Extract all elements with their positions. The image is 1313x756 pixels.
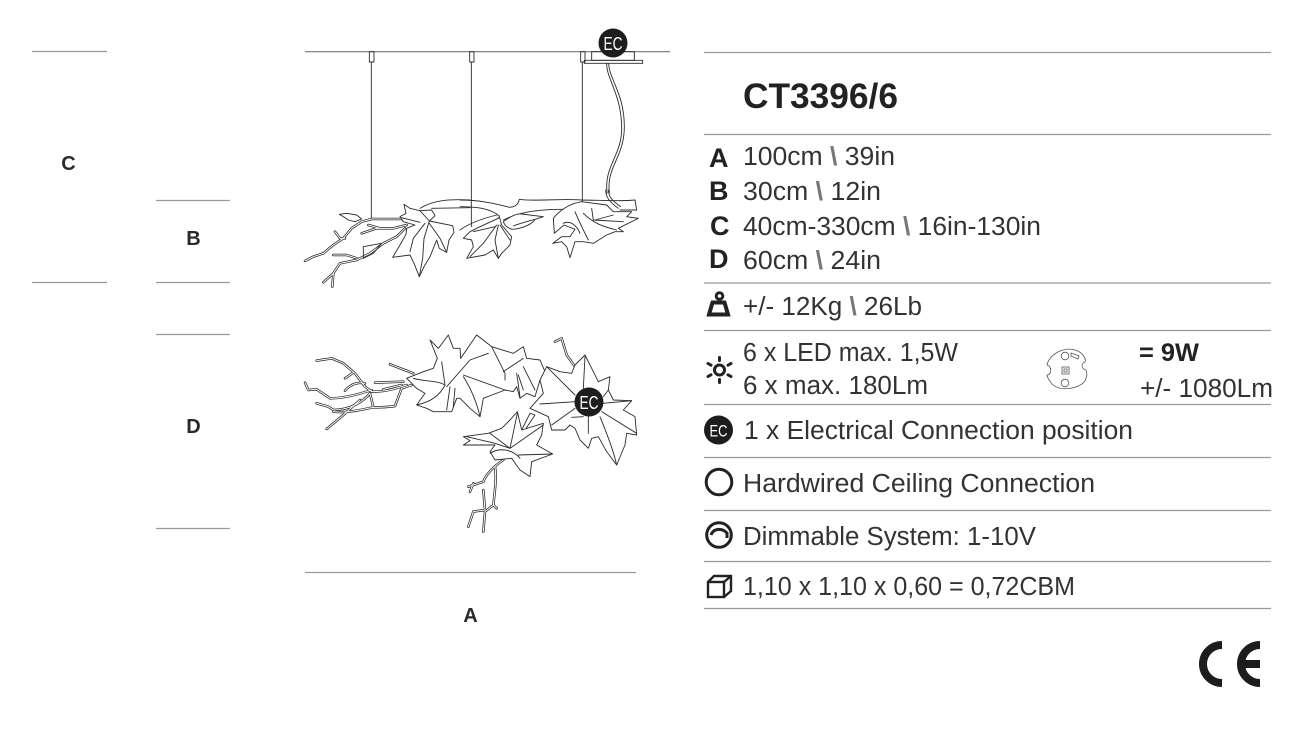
icon: EC: EC: [710, 422, 728, 440]
dimensions list: 100cm \ 39in: [743, 143, 895, 171]
product code title: CT3396/6: [743, 77, 898, 116]
icon: ceiling connection: [706, 469, 732, 495]
total power: = 9W: [1139, 339, 1199, 367]
icon: dimmable: [707, 523, 731, 547]
EC marker on side view: [598, 28, 628, 58]
electrical connection text: 1 x Electrical Connection position: [744, 417, 1133, 445]
hardwired text: Hardwired Ceiling Connection: [743, 470, 1095, 498]
EC marker on top view: [574, 388, 604, 416]
icon: LED module: [1047, 349, 1087, 389]
dimensions list: B: [709, 176, 728, 206]
dimensions list: 30cm \ 12in: [743, 178, 881, 206]
dimensions list: C: [710, 211, 730, 241]
top plan drawing: [305, 335, 637, 532]
EC marker on side view: EC: [604, 34, 622, 54]
side elevation drawing: [305, 52, 670, 287]
dimmable text: Dimmable System: 1-10V: [743, 523, 1036, 551]
icon: light: [708, 358, 731, 382]
icon: box: [708, 576, 731, 597]
LED text: [743, 339, 958, 400]
dimensions list: D: [709, 244, 728, 274]
volume text: 1,10 x 1,10 x 0,60 = 0,72CBM: [743, 573, 1075, 601]
dimensions list: [709, 143, 1041, 275]
dimension label C: C: [61, 153, 76, 175]
dimension label B: B: [186, 228, 201, 250]
icon: weight: [709, 293, 728, 314]
dimensions list: 60cm \ 24in: [743, 247, 881, 275]
weight text: +/- 12Kg \ 26Lb: [743, 293, 922, 321]
LED text: 6 x max. 180Lm: [743, 372, 928, 400]
total lumen: +/- 1080Lm: [1140, 375, 1273, 403]
dimensions list: A: [709, 143, 728, 173]
dimension label A: A: [463, 605, 478, 627]
icon: EC: [704, 416, 733, 444]
EC marker on top view: EC: [580, 393, 598, 413]
CE mark: [1203, 645, 1260, 683]
dimensions list: 40cm-330cm \ 16in-130in: [743, 213, 1041, 241]
dimension label D: D: [186, 416, 201, 438]
LED text: 6 x LED max. 1,5W: [743, 339, 958, 367]
